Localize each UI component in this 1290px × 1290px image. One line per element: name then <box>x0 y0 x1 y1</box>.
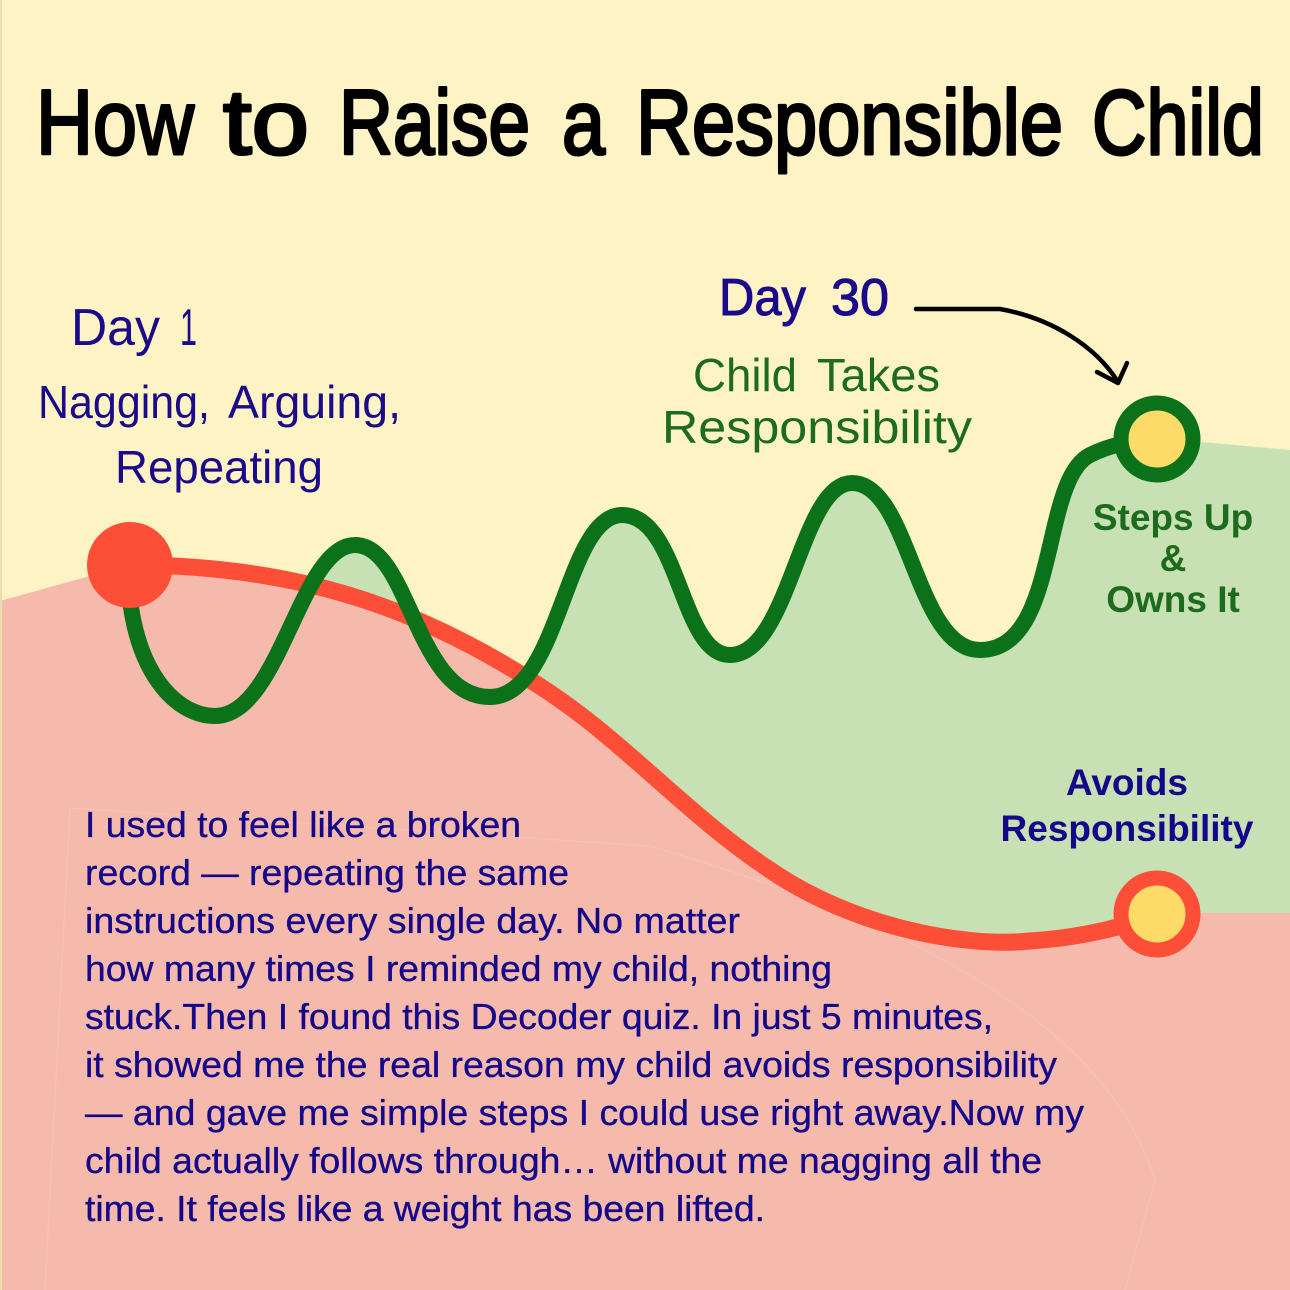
label: Child Takes Responsibility <box>662 349 972 453</box>
text block: testimonial: it showed me the real reason my child avoids responsibility <box>85 1044 1057 1085</box>
label: Day 30: 30 <box>831 269 889 327</box>
title <box>36 72 1264 174</box>
label: Avoids Responsibility: Avoids <box>1066 762 1188 803</box>
panel: red struggle area <box>0 565 1290 1290</box>
marker: red end dot <box>1121 878 1193 950</box>
text block: testimonial: time. It feels like a weight has been lifted. <box>85 1188 765 1229</box>
text block: testimonial: child actually follows through… without me nagging all the <box>85 1140 1042 1181</box>
text block: testimonial <box>85 804 1084 1229</box>
text block: testimonial: I used to feel like a broken <box>85 804 521 845</box>
arrow: Day 30 to goal <box>916 309 1127 383</box>
label: Steps Up & Owns It: & <box>1160 538 1186 579</box>
label: Day 1: Day <box>71 299 160 357</box>
label: Child Takes Responsibility: Responsibility <box>662 401 972 453</box>
label: Nagging, Arguing, Repeating: Arguing, <box>228 376 401 428</box>
label: Nagging, Arguing, Repeating <box>38 376 401 493</box>
marker: green goal dot <box>1121 403 1193 475</box>
label: Steps Up & Owns It: Owns It <box>1106 579 1240 620</box>
label: Child Takes Responsibility: Takes <box>817 349 940 401</box>
marker: start dot <box>87 522 173 608</box>
label: Nagging, Arguing, Repeating: Nagging, <box>38 376 210 428</box>
title: How <box>36 72 194 174</box>
label: Day 30 <box>719 269 889 327</box>
curve: green progress line <box>130 440 1155 716</box>
label: Child Takes Responsibility: Child <box>693 349 797 401</box>
title: Raise <box>339 72 530 174</box>
text block: testimonial: instructions every single day. No matter <box>85 900 740 941</box>
label: Avoids Responsibility: Responsibility <box>1001 808 1254 849</box>
text block: testimonial: how many times I reminded my child, nothing <box>85 948 832 989</box>
label: Steps Up & Owns It <box>1093 497 1253 620</box>
title: to <box>223 72 309 174</box>
text block: testimonial: — and gave me simple steps I could use right away.Now my <box>85 1092 1084 1133</box>
label: Day 1: 1 <box>180 299 197 357</box>
label: Avoids Responsibility <box>1001 762 1254 849</box>
panel: green success area <box>300 441 1290 970</box>
label: Steps Up & Owns It: Steps Up <box>1093 497 1253 538</box>
text block: testimonial: record — repeating the same <box>85 852 569 893</box>
text block: testimonial: stuck.Then I found this Decoder quiz. In just 5 minutes, <box>85 996 993 1037</box>
label: Nagging, Arguing, Repeating: Repeating <box>115 441 323 493</box>
title: a <box>562 72 606 174</box>
title: Responsible <box>636 72 1063 174</box>
curve: red decline line <box>130 565 1155 942</box>
label: Day 30: Day <box>719 269 806 327</box>
